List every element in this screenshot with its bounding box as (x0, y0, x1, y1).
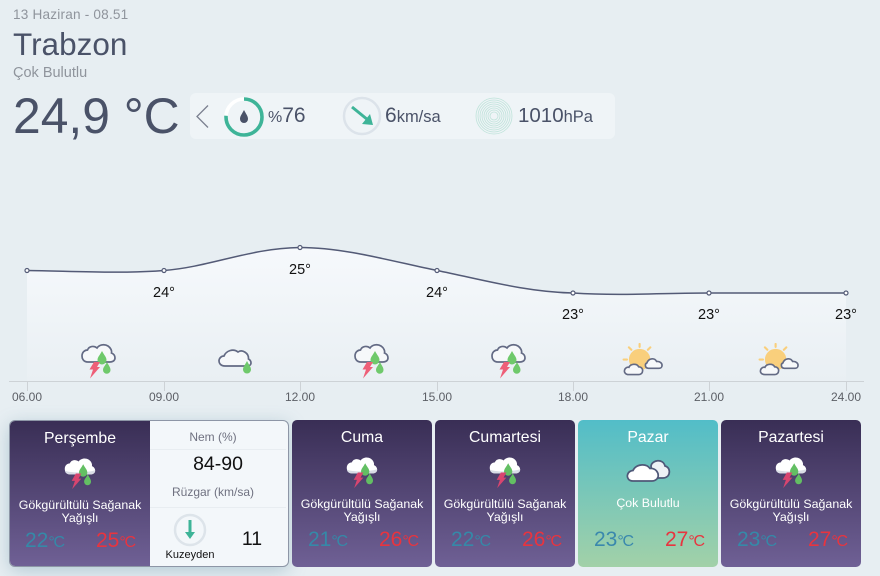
card: Pazar: Çok Bulutlu (616, 496, 680, 510)
panel: current metrics (190, 93, 615, 139)
icon: chevron left (196, 105, 208, 128)
time axis labels: 06.00 (12, 390, 42, 404)
temperature labels: 24° (153, 285, 175, 301)
card: Cumartesi: 22°C (451, 528, 490, 551)
card: Cumartesi (435, 420, 575, 567)
icon: humidity gauge (224, 97, 264, 137)
Perşembe summary: Yağışlı (62, 510, 98, 524)
Perşembe summary: 22°C (25, 529, 64, 552)
card: Pazar: 27°C (665, 528, 704, 551)
time axis labels (12, 390, 861, 404)
card: Pazartesi: Yağışlı (773, 510, 809, 524)
card: Cuma: 26°C (379, 528, 418, 551)
card: Cumartesi: Gökgürültülü Sağanak (444, 497, 566, 511)
card: Pazartesi (721, 420, 861, 567)
pressure value: 1010hPa (518, 104, 593, 127)
icon: wind gauge (342, 96, 382, 136)
card: Pazar: Pazar (627, 429, 669, 446)
city title: Trabzon (13, 26, 127, 62)
card: Pazar (578, 420, 718, 567)
card: Cuma: Yağışlı (344, 510, 380, 524)
date and time: 13 Haziran - 08.51 (13, 7, 128, 22)
card: Cuma: 21°C (308, 528, 347, 551)
card: Cuma: Gökgürültülü Sağanak (301, 497, 423, 511)
time axis labels: 18.00 (558, 390, 588, 404)
time axis labels: 24.00 (831, 390, 861, 404)
wind heading: Rüzgar (km/sa) (172, 485, 254, 499)
temperature labels: 23° (562, 307, 584, 323)
hourly weather icons (81, 343, 799, 378)
time axis labels: 09.00 (149, 390, 179, 404)
card: Pazartesi: 23°C (737, 528, 776, 551)
line chart: hourly temperature (9, 244, 864, 391)
temperature labels: 23° (698, 307, 720, 323)
card: Cuma: Cuma (341, 429, 383, 446)
card: Cumartesi: Cumartesi (469, 429, 541, 446)
humidity heading: Nem (%) (189, 430, 237, 444)
Perşembe summary: 25°C (96, 529, 135, 552)
current temperature: 24,9 °C (13, 88, 180, 144)
Perşembe summary: Gökgürültülü Sağanak (19, 498, 141, 512)
card: Pazartesi: Pazartesi (758, 429, 824, 446)
wind value: 6km/sa (385, 104, 441, 127)
Perşembe summary: Perşembe (44, 430, 116, 447)
current condition: Çok Bulutlu (13, 65, 87, 81)
icon: cloudy (626, 460, 670, 482)
card: Cumartesi: Yağışlı (487, 510, 523, 524)
time axis labels: 21.00 (694, 390, 724, 404)
wind speed: 11 (242, 528, 262, 550)
wind direction label: Kuzeyden (166, 549, 214, 561)
Perşembe summary (10, 421, 150, 566)
card: Pazar: 23°C (594, 528, 633, 551)
card: Pazartesi: Gökgürültülü Sağanak (730, 497, 852, 511)
time axis labels: 12.00 (285, 390, 315, 404)
time axis labels: 15.00 (422, 390, 452, 404)
humidity range: 84-90 (193, 453, 243, 475)
icon: pressure rings (476, 98, 512, 134)
icon: wind direction (174, 514, 206, 546)
card: Perşembe expanded (10, 421, 288, 566)
temperature labels: 25° (289, 262, 311, 278)
card: Cumartesi: 26°C (522, 528, 561, 551)
card: Pazartesi: 27°C (808, 528, 847, 551)
temperature labels (153, 262, 857, 323)
humidity value: %76 (268, 104, 306, 127)
temperature labels: 24° (426, 285, 448, 301)
temperature labels: 23° (835, 307, 857, 323)
card: Cuma (292, 420, 432, 567)
